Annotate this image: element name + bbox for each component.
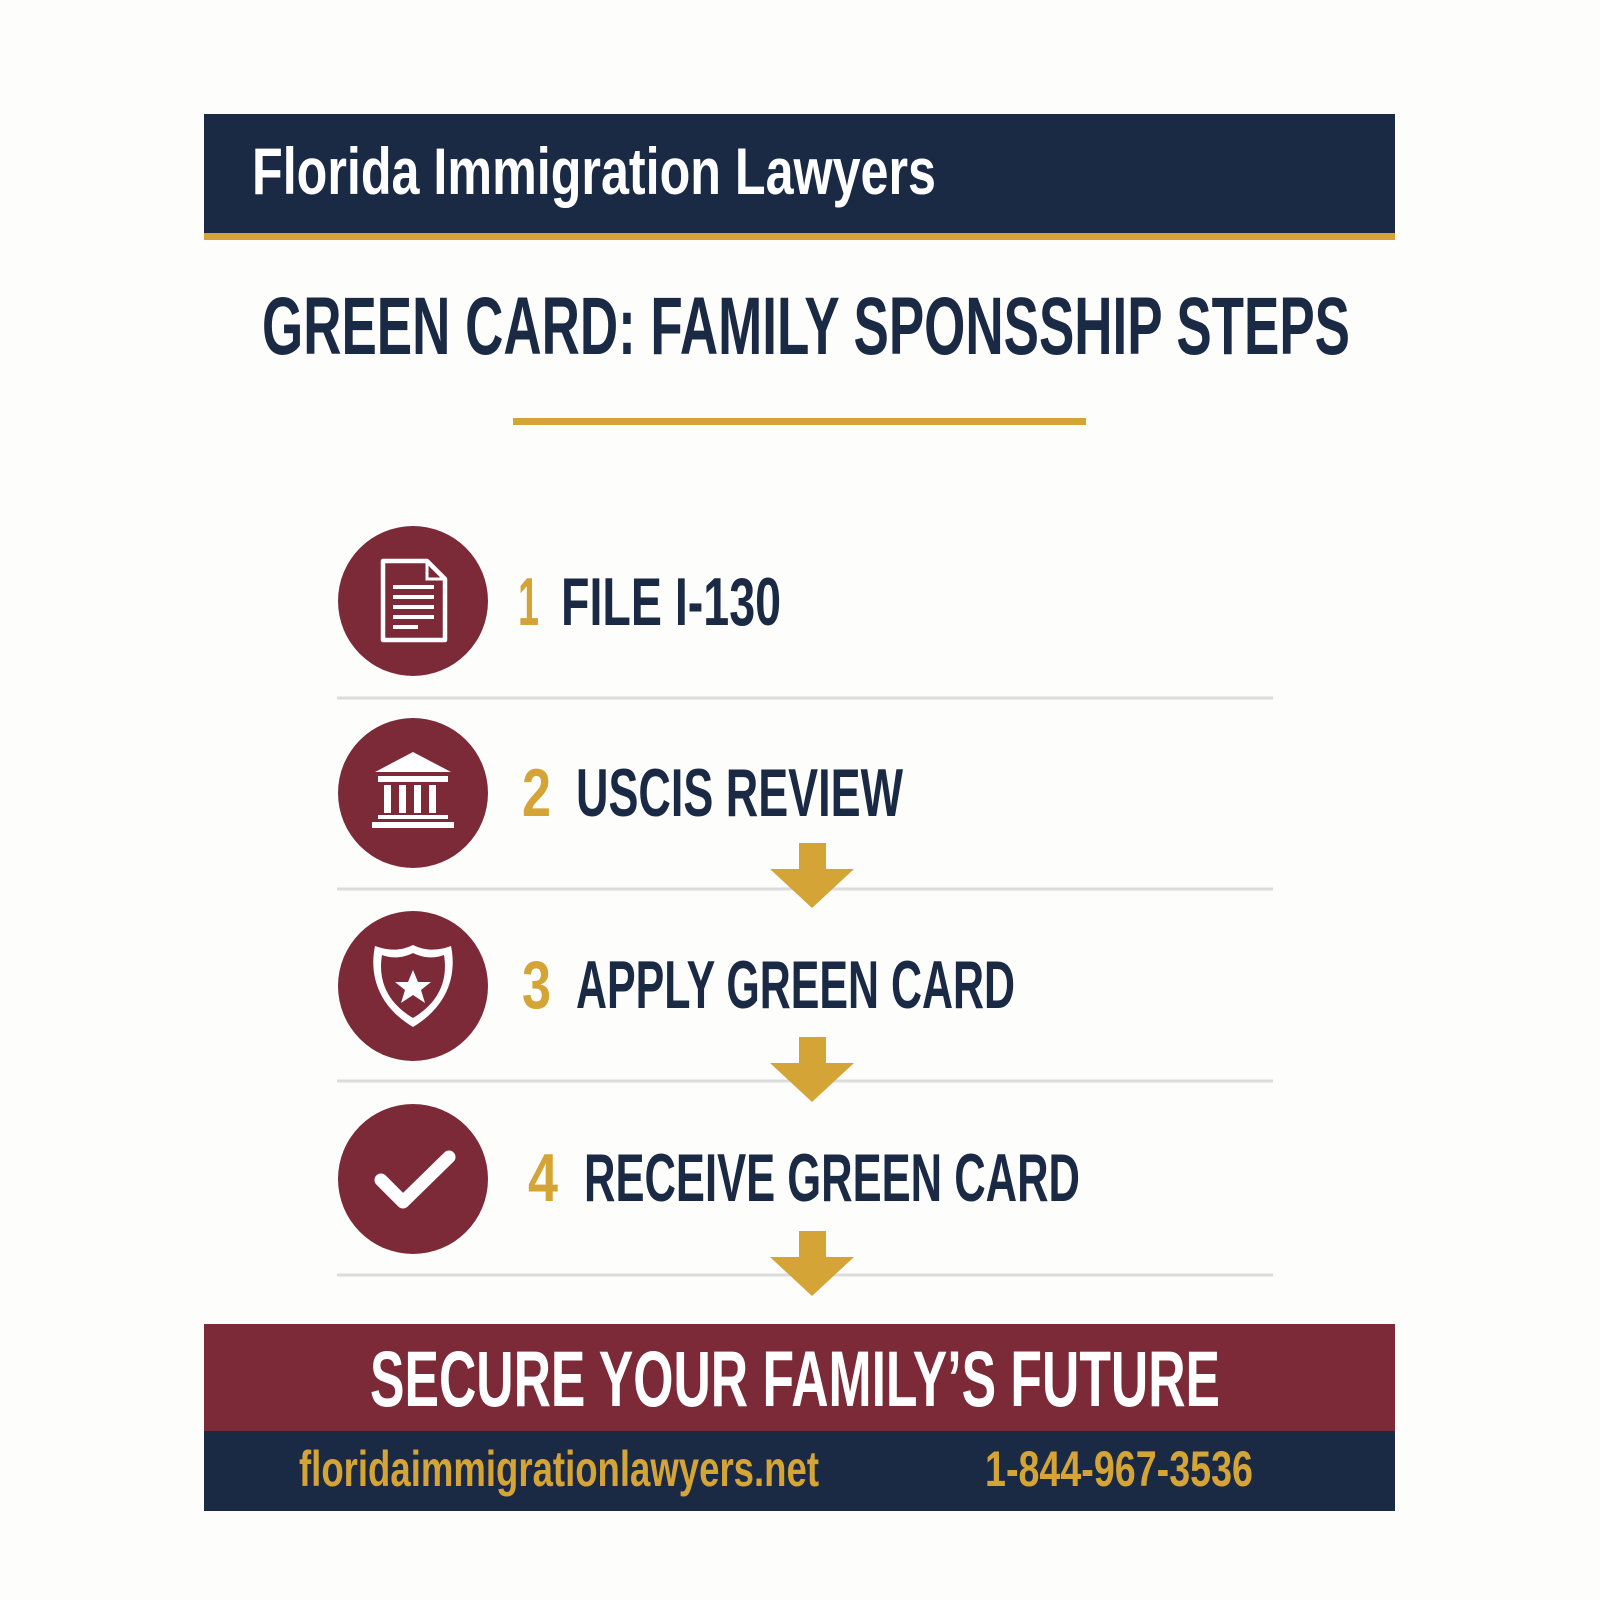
step 2: 2 <box>522 755 551 831</box>
step 1: 1 <box>518 564 539 640</box>
step 3 <box>338 911 1015 1061</box>
step 3: APPLY GREEN CARD <box>576 947 1015 1023</box>
icon: building <box>338 718 488 868</box>
step 4: RECEIVE GREEN CARD <box>584 1140 1080 1216</box>
title underline <box>513 418 1086 425</box>
icon: shield badge <box>338 911 488 1061</box>
arrow 3 <box>770 1231 854 1296</box>
step 3: 3 <box>522 947 551 1023</box>
icon: document <box>338 526 488 676</box>
header bar <box>204 114 1395 240</box>
website: floridaimmigrationlawyers.net <box>299 1441 819 1497</box>
header text: Florida Immigration Lawyers <box>252 134 936 208</box>
step 4: 4 <box>528 1140 558 1216</box>
footer banner <box>204 1324 1395 1511</box>
step 1: FILE I-130 <box>561 564 781 640</box>
arrow 2 <box>770 1037 854 1102</box>
step 2: USCIS REVIEW <box>576 755 904 831</box>
step 4 <box>338 1104 1080 1254</box>
icon: checkmark <box>338 1104 488 1254</box>
arrow 1 <box>770 843 854 908</box>
phone: 1-844-967-3536 <box>985 1441 1253 1497</box>
step 1 <box>338 526 781 676</box>
step 2 <box>338 718 904 868</box>
